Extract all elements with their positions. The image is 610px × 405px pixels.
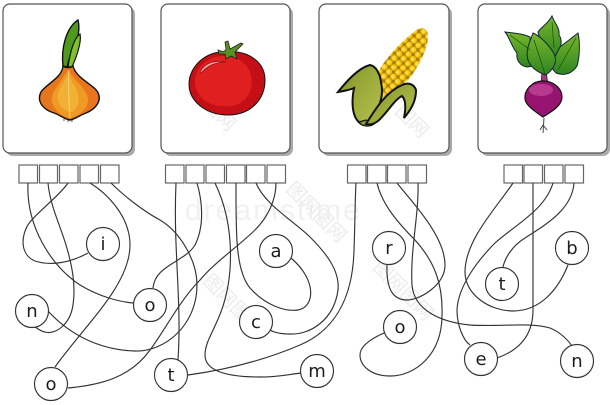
letter circle i: i: [100, 234, 106, 255]
tangled connector lines: [23, 183, 574, 388]
letter circle t: [154, 358, 188, 392]
letter circle i: [86, 228, 120, 260]
letter boxes: beet: [504, 165, 584, 183]
watermark: 图网图网: [368, 257, 437, 325]
letter circle e: [464, 342, 498, 376]
letter circle c: c: [251, 312, 261, 333]
letter circle c: [240, 306, 272, 338]
letter circle o: o: [45, 374, 57, 395]
letter circle o: o: [144, 295, 156, 316]
letter circle r: r: [385, 238, 393, 259]
letter circle b: b: [566, 238, 578, 259]
letter circle o: o: [394, 317, 406, 338]
letter boxes: corn: [348, 165, 426, 183]
watermark over tomato card: 图图网: [184, 81, 240, 136]
letter circle n: [560, 344, 594, 378]
panel: beet card: [478, 4, 610, 156]
icon: tomato: [189, 41, 265, 115]
letter circle m: m: [308, 361, 326, 382]
letter circle o: [134, 288, 166, 322]
letter boxes: onion: [19, 165, 119, 183]
letter circle n: [16, 294, 48, 328]
letter circle r: [372, 232, 406, 264]
letter circle t: t: [167, 365, 175, 386]
watermark: [185, 179, 437, 339]
panel: tomato card: [161, 4, 293, 156]
icon: onion: [39, 20, 99, 122]
letter circle t: [486, 268, 518, 300]
icon: beetroot: [505, 16, 579, 133]
letter circle m: [300, 354, 334, 388]
letter circle n: n: [26, 301, 38, 322]
letter circle b: [556, 232, 588, 264]
panel: corn card: [319, 4, 452, 156]
panel: onion card: [3, 4, 135, 156]
icon: corn: [338, 28, 428, 126]
letter circle o: [384, 310, 416, 344]
watermark over corn card: 图网: [390, 101, 432, 142]
letter circle n: n: [571, 351, 583, 372]
letter boxes: tomato: [166, 165, 286, 183]
watermark: dreamstime: [185, 194, 362, 227]
watermark: 图网图网: [198, 271, 267, 339]
letter circle a: a: [270, 241, 282, 262]
letter circle o: [34, 368, 68, 400]
watermark: 图网图网: [281, 179, 350, 247]
letter circle e: e: [475, 349, 487, 370]
letter circle t: t: [498, 274, 506, 295]
letter circle a: [260, 234, 292, 268]
